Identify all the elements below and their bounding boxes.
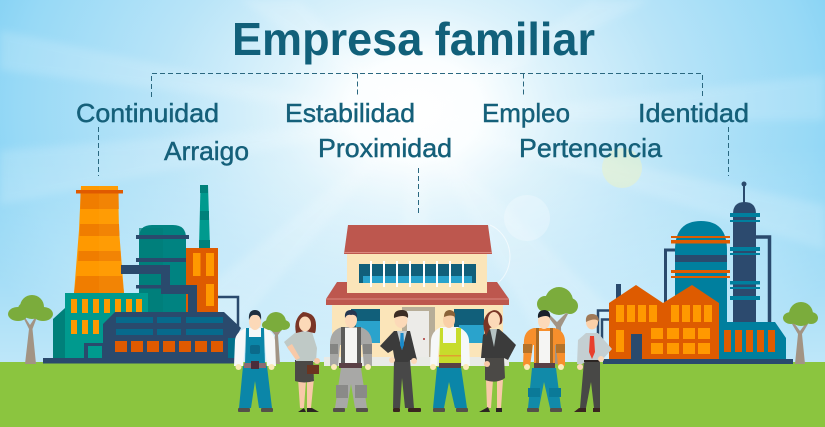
label: Pertenencia: Pertenencia — [519, 133, 663, 163]
people — [234, 310, 612, 412]
person: worker in grey — [330, 310, 372, 412]
round tank — [671, 221, 730, 323]
upper roof — [344, 225, 492, 254]
navy tower — [730, 182, 760, 323]
label: Empleo: Empleo — [482, 98, 570, 128]
person: worker in orange jacket — [523, 310, 565, 412]
orange building — [186, 248, 218, 312]
cooling tower — [74, 186, 124, 293]
thin pipe — [216, 297, 238, 328]
person: woman in grey blouse — [284, 312, 320, 412]
green tank — [136, 225, 189, 312]
person: man in grey shirt with red tie — [574, 314, 612, 412]
door — [402, 307, 435, 357]
teal building — [53, 293, 148, 358]
upper walls — [347, 253, 487, 293]
tree: right of house — [537, 287, 578, 364]
pipes — [598, 237, 770, 350]
person: businesswoman in dark suit — [479, 310, 516, 412]
lower roof — [326, 282, 509, 305]
navy building — [43, 312, 241, 364]
label: Proximidad: Proximidad — [318, 133, 452, 163]
label: Continuidad: Continuidad — [76, 98, 219, 128]
tree: far right — [783, 302, 818, 364]
base — [603, 359, 793, 364]
chimney — [199, 185, 210, 248]
upper windows — [359, 264, 476, 283]
orange building — [609, 285, 719, 360]
tree: far left — [8, 295, 53, 364]
person: worker in blue overalls — [234, 310, 276, 412]
label: Arraigo: Arraigo — [164, 136, 249, 166]
person: businessman in black suit — [380, 310, 421, 412]
label: Identidad: Identidad — [638, 98, 749, 128]
ground floor — [332, 305, 503, 358]
navy pipe — [121, 265, 197, 314]
person: worker in yellow vest — [430, 310, 470, 412]
title: Empresa familiar — [232, 13, 595, 65]
label: Estabilidad: Estabilidad — [285, 98, 415, 128]
dashed connectors — [98, 74, 728, 216]
factory: left — [43, 185, 241, 364]
ground — [0, 362, 825, 427]
ground floor windows — [351, 309, 380, 343]
blue building — [719, 322, 786, 360]
factory: right — [598, 182, 793, 364]
house — [324, 225, 509, 366]
tree: behind worker — [262, 312, 290, 364]
